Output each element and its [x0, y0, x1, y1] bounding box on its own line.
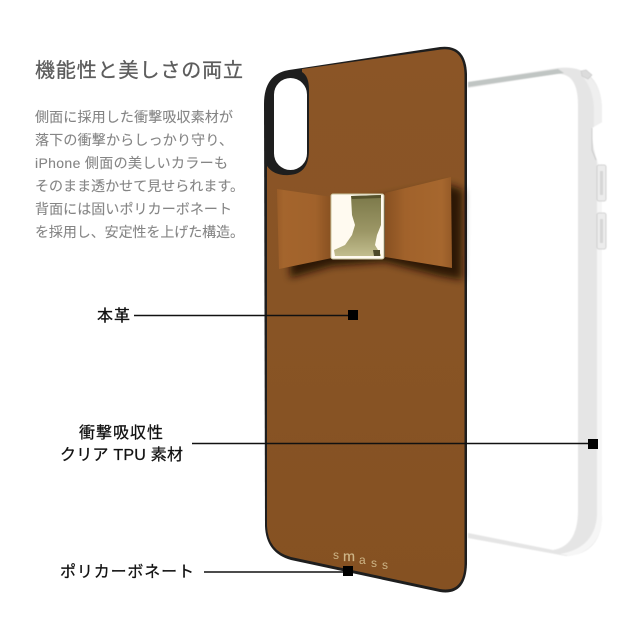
brand logo: a	[359, 553, 366, 567]
clear TPU frame	[468, 68, 606, 556]
brand logo: s	[333, 548, 339, 562]
text block: description: を採用し、安定性を上げた構造。	[35, 224, 244, 240]
polycarbonate shell	[264, 47, 467, 592]
brand logo: s	[382, 558, 388, 572]
brand logo: s	[371, 556, 377, 570]
phone back cover	[264, 47, 467, 592]
callout: clear TPU: 衝撃吸収性	[79, 424, 163, 442]
callout: polycarbonate: ポリカーボネート	[60, 563, 194, 581]
frame body	[468, 68, 602, 556]
text block: description: 落下の衝撃からしっかり守り、	[35, 132, 233, 148]
callout: leather	[97, 307, 358, 325]
corner detail	[581, 70, 592, 79]
callout: clear TPU	[60, 424, 598, 464]
right highlight	[560, 100, 602, 556]
text block: description: iPhone 側面の美しいカラーも	[35, 155, 228, 171]
metal buckle	[331, 194, 384, 259]
text block: description: 側面に採用した衝撃吸収素材が	[35, 109, 233, 125]
title: 機能性と美しさの両立	[35, 59, 243, 82]
brand logo	[333, 548, 388, 572]
text block: description	[35, 109, 244, 240]
callout: polycarbonate	[60, 563, 353, 581]
leather panel	[267, 49, 464, 589]
text block: description: そのまま透かせて見せられます。	[35, 178, 244, 194]
side cutout	[592, 120, 606, 165]
callout: leather: 本革	[97, 307, 130, 325]
brand logo: m	[343, 548, 355, 564]
callout: clear TPU: クリア TPU 素材	[60, 446, 183, 464]
bow shadow	[290, 185, 463, 280]
side buttons	[597, 165, 606, 249]
top edge	[468, 69, 564, 87]
bow	[277, 177, 452, 269]
text block: description: 背面には固いポリカーボネート	[35, 201, 232, 217]
camera cutout	[274, 78, 307, 170]
